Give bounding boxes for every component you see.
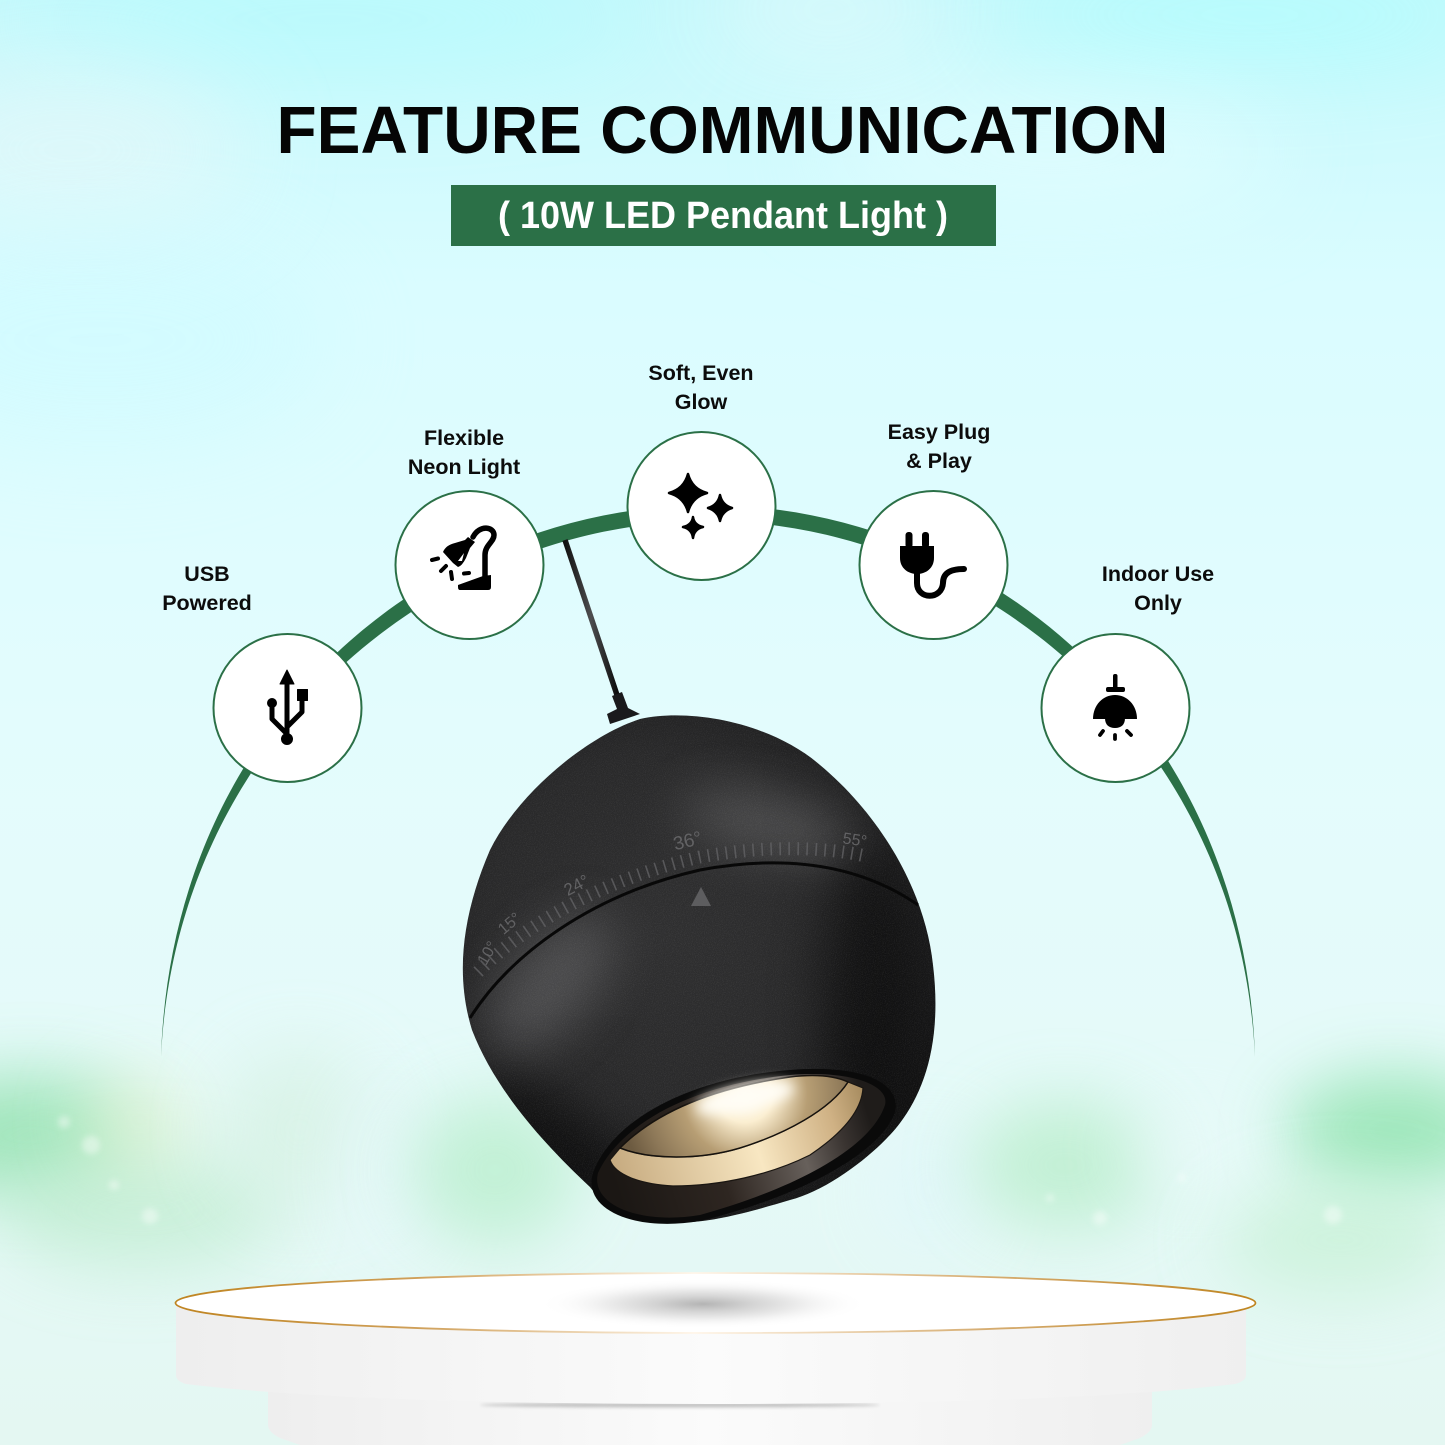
label: Powered [162,591,252,615]
label: & Play [906,449,972,473]
angle scale labels: 24° [561,871,592,900]
lower tier [268,1385,1152,1445]
label: Indoor Use [1102,562,1214,586]
icon: usb [268,670,308,744]
feature: Easy Plug & Play [860,420,1008,639]
angle scale labels: 15° [495,910,525,938]
rotating seam [470,863,918,1018]
icon: pendant lamp [1093,674,1137,739]
feature: Indoor Use Only [1042,562,1214,782]
feature: Flexible Neon Light [396,426,544,639]
pointer triangle [691,887,711,906]
subtitle banner: ( 10W LED Pendant Light ) [498,195,948,237]
podium [176,1273,1256,1445]
icon: sparkles [669,474,732,538]
bright hotspot [693,1075,797,1121]
angle scale labels: 36° [671,828,704,855]
angle scale labels: 55° [842,830,868,851]
subtitle banner [451,185,996,246]
lamp highlights and texture [463,716,936,1220]
feature: USB Powered [162,562,362,782]
green arc connecting features [161,505,1255,1057]
green bokeh band [0,1075,160,1195]
tier shadow [480,1402,880,1408]
upper tier [176,1305,1246,1404]
label: Neon Light [408,455,520,479]
label: Glow [675,390,728,414]
lit lens [620,1076,848,1157]
feature: Soft, Even Glow [628,361,776,580]
pendant lamp photo [450,692,950,1245]
lamp connector [607,692,640,724]
bokeh sparkles [58,1116,1342,1225]
pendant cable [565,540,617,695]
angle scale labels [475,828,868,968]
icon: plug [900,532,964,596]
lamp shadow on surface [538,1279,868,1329]
inner metal rim [597,1074,885,1218]
top surface with gold edge [176,1273,1256,1333]
label: Soft, Even [648,361,754,385]
angle scale ticks [478,849,866,972]
title: FEATURE COMMUNICATION [276,93,1168,168]
light opening outer ring [592,1069,896,1224]
icon: desk lamp [432,528,494,590]
label: USB [184,562,230,586]
label: Easy Plug [888,420,990,444]
angle scale labels: 10° [475,939,501,968]
warm light band [610,1082,863,1186]
label: Flexible [424,426,504,450]
lamp body [463,715,935,1222]
label: Only [1134,591,1182,615]
